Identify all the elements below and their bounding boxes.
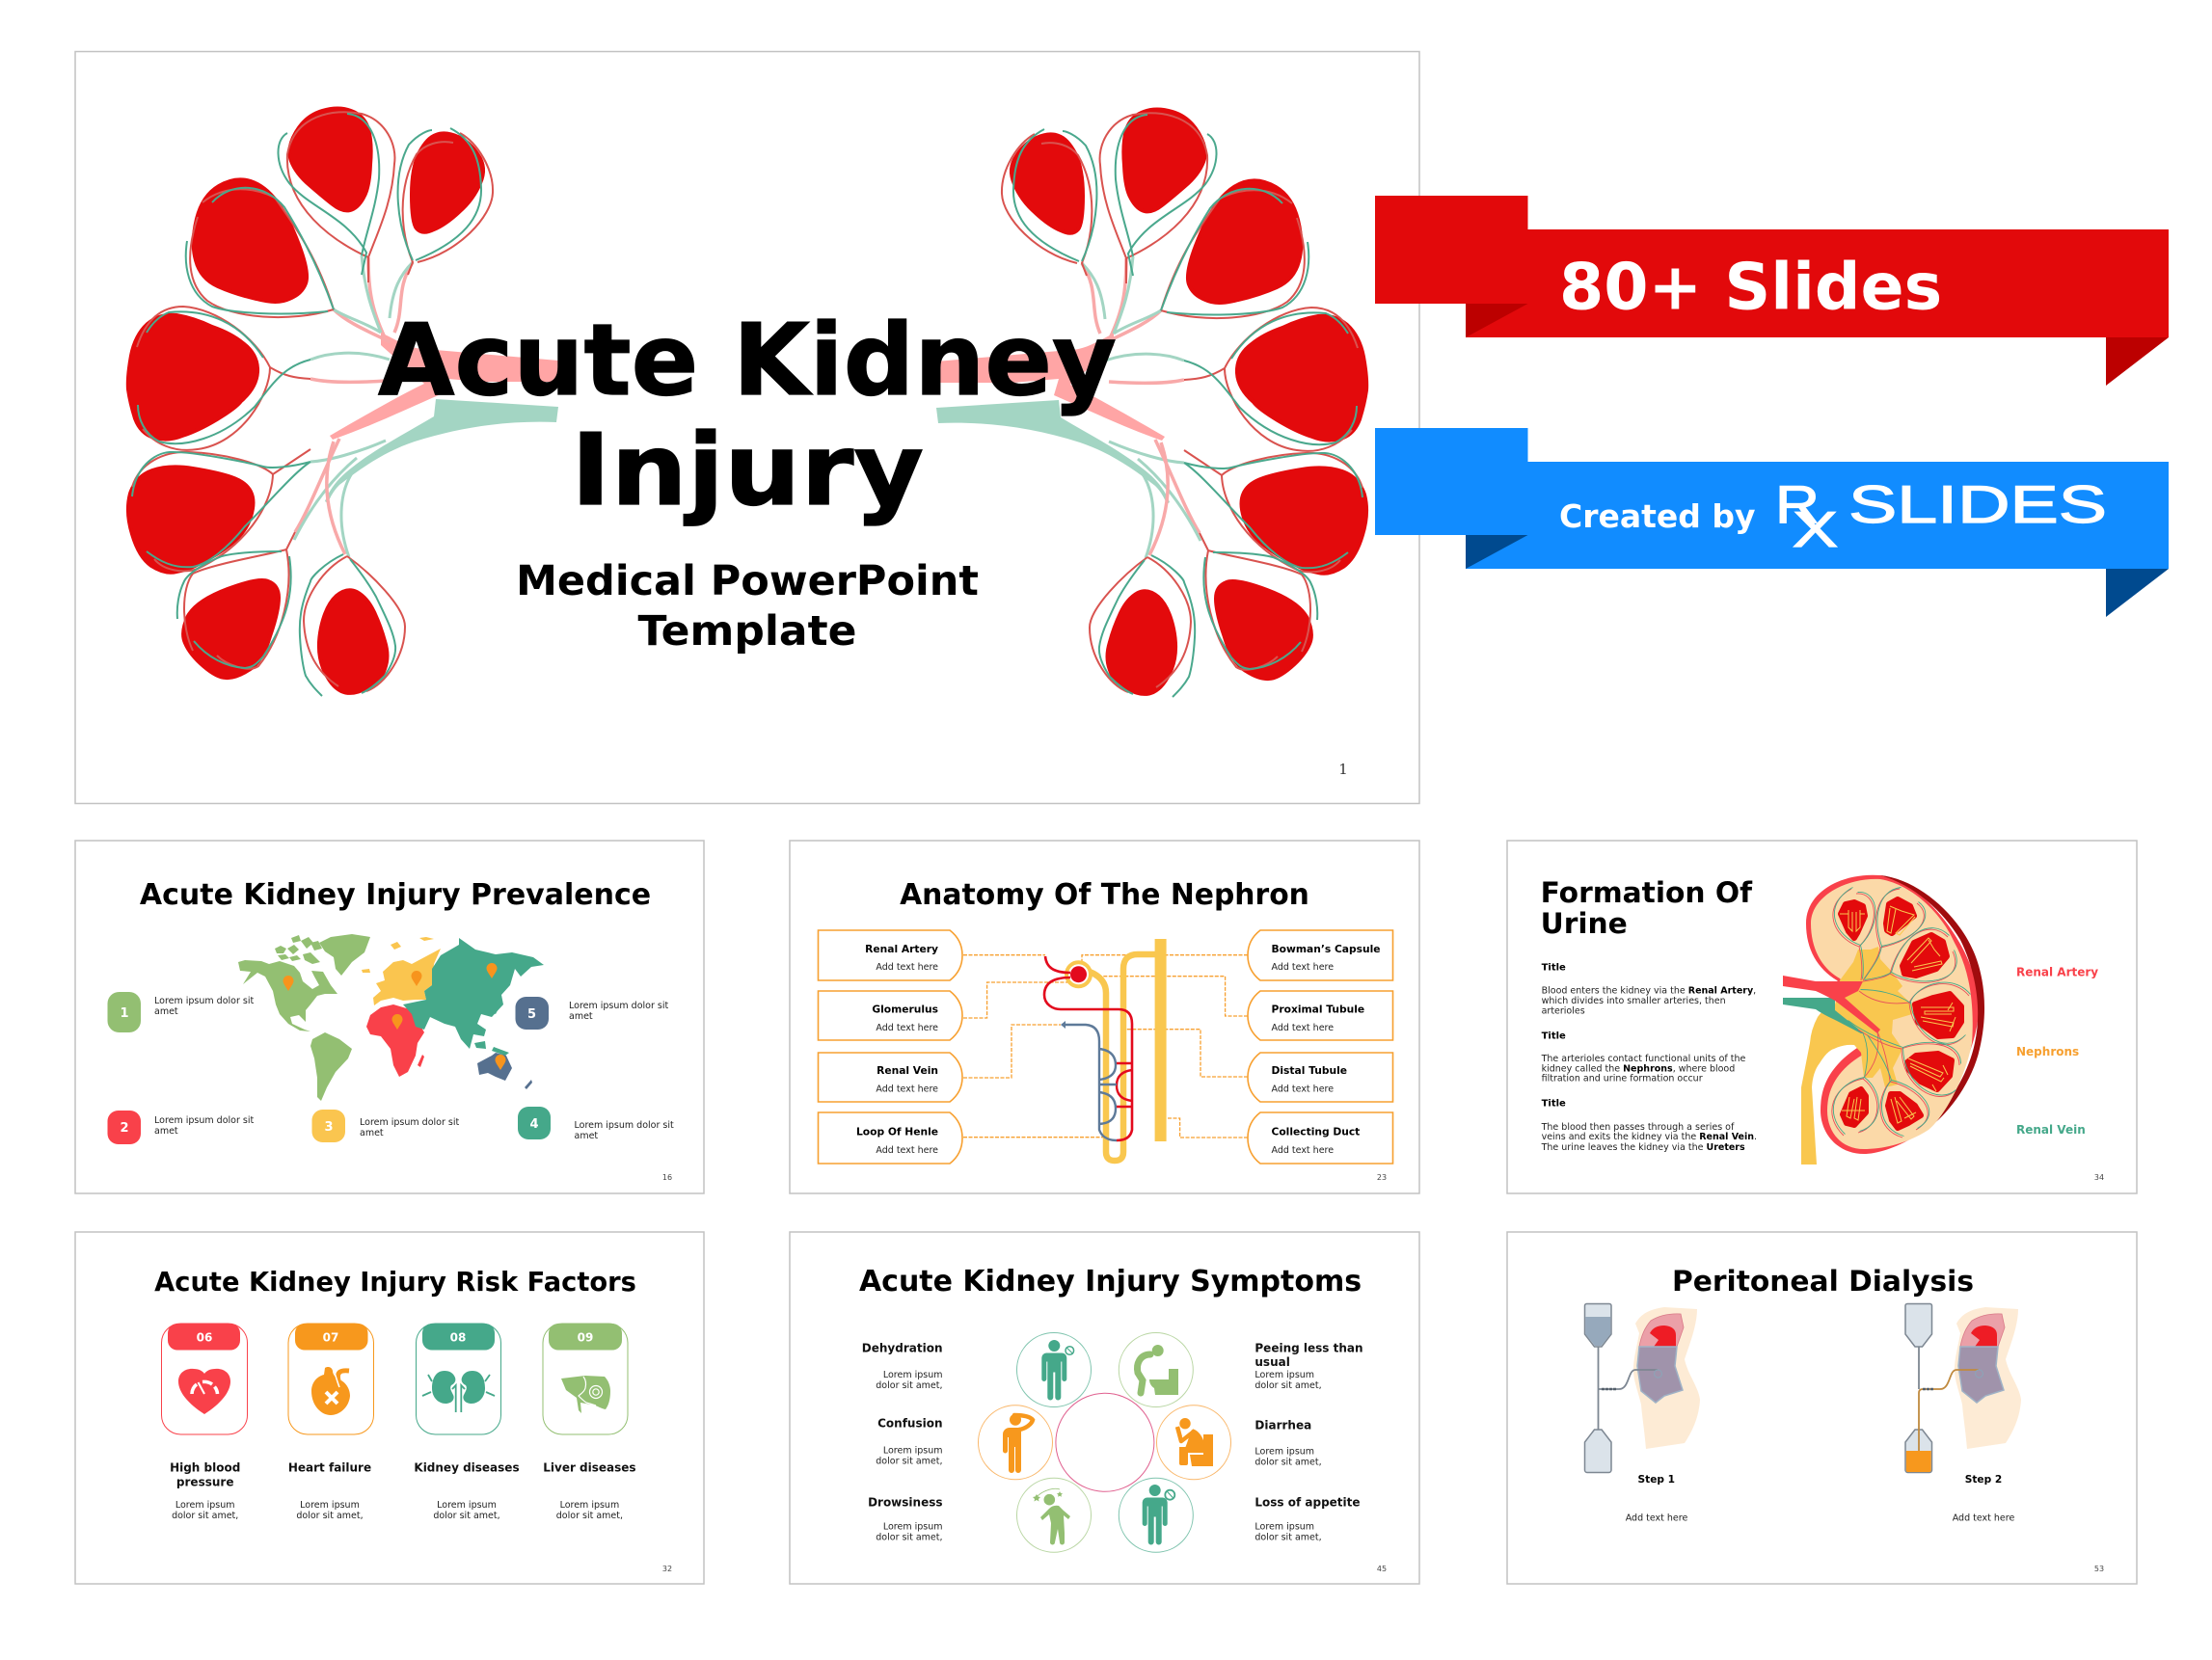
heading: Acute Kidney Injury Prevalence bbox=[140, 878, 651, 912]
text block 2: Title bbox=[1542, 1031, 1566, 1041]
label: Proximal Tubule bbox=[1248, 991, 1392, 1040]
text: Diarrhea: Diarrhea bbox=[1254, 1418, 1311, 1432]
tube clamp bbox=[1602, 1388, 1616, 1390]
card: liver diseases: 09 bbox=[578, 1331, 593, 1345]
legend item 4: Lorem ipsum dolor sit bbox=[575, 1120, 674, 1131]
dark outer rim bbox=[1880, 875, 1984, 1136]
location pins bbox=[283, 963, 505, 1070]
body bbox=[1633, 1307, 1700, 1449]
card: kidney diseases bbox=[417, 1324, 501, 1434]
heading: Anatomy Of The Nephron bbox=[900, 878, 1309, 912]
kidney outer wall bbox=[1806, 875, 1979, 1154]
caption: heart failure: Lorem ipsum bbox=[300, 1500, 360, 1511]
illustration: right half of kidney lobes (mirror) bbox=[936, 110, 1366, 697]
diagram: step 1 bbox=[1585, 1303, 1700, 1473]
page number: 32 bbox=[662, 1565, 672, 1573]
page number: 45 bbox=[1377, 1565, 1387, 1573]
label: Renal Artery: Add text here bbox=[876, 962, 938, 973]
label: Renal Artery: Renal Artery bbox=[865, 943, 938, 955]
ribbon text: 80+ Slides bbox=[1559, 249, 1942, 324]
caption: step 1: Add text here bbox=[1626, 1513, 1687, 1523]
icon: liver bbox=[561, 1376, 610, 1413]
legend item 1: Lorem ipsum dolor sit bbox=[154, 996, 254, 1006]
label: Proximal Tubule: Proximal Tubule bbox=[1271, 1004, 1364, 1016]
caption: kidney diseases: Kidney diseases bbox=[414, 1461, 520, 1475]
label: Loop Of Henle bbox=[818, 1112, 962, 1164]
caption: kidney diseases bbox=[414, 1461, 520, 1521]
legend item 2: Lorem ipsum dolor sit bbox=[154, 1115, 254, 1126]
caption: kidney diseases: Lorem ipsum bbox=[437, 1500, 497, 1511]
top tube bbox=[1918, 1347, 1920, 1389]
legend item 5: amet bbox=[569, 1011, 593, 1022]
text: Peeing less than usual bbox=[1254, 1341, 1363, 1391]
text: Confusion: Lorem ipsum bbox=[883, 1446, 943, 1457]
page number: 34 bbox=[2094, 1173, 2104, 1182]
caption: heart failure: Heart failure bbox=[288, 1461, 371, 1475]
label: Distal Tubule bbox=[1248, 1053, 1392, 1102]
text: Diarrhea bbox=[1254, 1418, 1322, 1468]
caption: kidney diseases: dolor sit amet, bbox=[433, 1511, 500, 1521]
legend item 3: 3 bbox=[324, 1120, 334, 1135]
card: liver diseases bbox=[543, 1324, 628, 1434]
caption: high blood pressure bbox=[170, 1461, 240, 1521]
text block 1: Title bbox=[1542, 963, 1566, 974]
text block 1: Blood enters the kidney via the Renal Artery, bbox=[1542, 986, 1756, 997]
label: Bowman's Capsule bbox=[1248, 930, 1392, 980]
legend item 3: amet bbox=[360, 1128, 384, 1138]
text block 2 bbox=[1541, 1031, 1746, 1084]
renal vein bbox=[1783, 998, 1864, 1033]
main title: Acute Kidney bbox=[378, 304, 1117, 418]
tubules inside lobes bbox=[1840, 906, 1956, 1123]
caption: high blood pressure: pressure bbox=[176, 1476, 233, 1489]
icon: kidneys bbox=[422, 1371, 495, 1412]
caption: liver diseases bbox=[543, 1461, 636, 1521]
label: Glomerulus: Glomerulus bbox=[872, 1004, 938, 1016]
caption: step 1 bbox=[1626, 1474, 1687, 1523]
caption: step 1: Step 1 bbox=[1638, 1474, 1675, 1486]
text block 2: filtration and urine formation occur bbox=[1542, 1074, 1703, 1084]
legend item 1: amet bbox=[154, 1006, 178, 1017]
heading: Formation Of bbox=[1541, 876, 1753, 910]
logo: Rx Slides: SLIDES bbox=[1848, 474, 2107, 534]
caption: high blood pressure: dolor sit amet, bbox=[172, 1511, 238, 1521]
drain tubing bbox=[1919, 1370, 1979, 1451]
label: Collecting Duct: Collecting Duct bbox=[1271, 1126, 1360, 1138]
card: kidney diseases: 08 bbox=[450, 1331, 466, 1345]
Americas and Greenland bbox=[238, 934, 370, 1101]
body bbox=[1955, 1307, 2021, 1449]
top bag bbox=[1905, 1303, 1932, 1347]
label: Renal Artery bbox=[818, 930, 962, 980]
illustration: left half of kidney lobes bbox=[128, 108, 558, 696]
label: Renal Artery: Renal Artery bbox=[2016, 966, 2098, 979]
panel: formation of urine slide bbox=[1507, 841, 2137, 1193]
label: Renal Vein bbox=[818, 1053, 962, 1102]
dashed connectors bbox=[963, 955, 1248, 1138]
world map bbox=[238, 934, 544, 1101]
label: Bowman's Capsule: Add text here bbox=[1271, 962, 1334, 973]
logo: Rx Slides bbox=[1775, 474, 2107, 558]
Australia bbox=[477, 1053, 532, 1089]
heading: Urine bbox=[1541, 907, 1628, 941]
bottom bag bbox=[1905, 1430, 1932, 1473]
abdominal cavity bbox=[1639, 1314, 1684, 1347]
text: Diarrhea: Lorem ipsum bbox=[1254, 1447, 1314, 1458]
card: high blood pressure: 06 bbox=[197, 1331, 212, 1345]
legend item 2 bbox=[108, 1111, 254, 1144]
label: Distal Tubule: Add text here bbox=[1271, 1084, 1334, 1095]
icon: person dehydration bbox=[1041, 1340, 1074, 1400]
text: Peeing less than usual: dolor sit amet, bbox=[1254, 1380, 1322, 1391]
caption: high blood pressure: Lorem ipsum bbox=[175, 1500, 235, 1511]
page number: 16 bbox=[662, 1173, 672, 1182]
kidney inner tissue bbox=[1811, 879, 1973, 1149]
text block 3: The urine leaves the kidney via the Ureters bbox=[1541, 1142, 1745, 1153]
diagram: step 2 bbox=[1905, 1303, 2021, 1473]
icon: person with diarrhea on toilet bbox=[1177, 1418, 1213, 1466]
text: Confusion: Confusion bbox=[877, 1417, 943, 1431]
caption: step 2 bbox=[1953, 1474, 2014, 1523]
top bag bbox=[1585, 1303, 1611, 1347]
label: Glomerulus bbox=[818, 991, 962, 1040]
text: Drowsiness: Drowsiness bbox=[868, 1495, 943, 1509]
text: Dehydration: Dehydration bbox=[862, 1341, 943, 1354]
label: Bowman's Capsule: Bowman’s Capsule bbox=[1271, 943, 1381, 955]
text: Loss of appetite: Loss of appetite bbox=[1254, 1495, 1361, 1509]
legend item 1 bbox=[108, 992, 254, 1032]
heading: Acute Kidney Injury Risk Factors bbox=[154, 1268, 636, 1298]
text block 3: Title bbox=[1542, 1099, 1566, 1110]
panel: risk factors slide bbox=[75, 1232, 704, 1584]
caption: heart failure bbox=[288, 1461, 371, 1521]
legend item 4: amet bbox=[575, 1131, 598, 1141]
caption: heart failure: dolor sit amet, bbox=[296, 1511, 364, 1521]
label: Loop Of Henle: Add text here bbox=[876, 1145, 938, 1156]
text block 3: veins and exits the kidney via the Renal Vein. bbox=[1542, 1132, 1757, 1142]
text block 1: arterioles bbox=[1542, 1005, 1585, 1016]
subtitle line 2: Template bbox=[638, 607, 856, 656]
icon: dizzy person bbox=[1033, 1488, 1070, 1544]
renal artery bbox=[1783, 976, 1880, 1033]
Europe bbox=[362, 937, 441, 1005]
text block 1 bbox=[1542, 963, 1756, 1016]
legend item 5: Lorem ipsum dolor sit bbox=[569, 1001, 668, 1011]
main renal vein band bbox=[325, 399, 558, 503]
ribbon: 80+ slides bbox=[1375, 196, 2169, 386]
legend item 4: 4 bbox=[529, 1117, 539, 1132]
text: Drowsiness bbox=[868, 1495, 943, 1543]
symptom rings bbox=[978, 1332, 1230, 1552]
text: Dehydration: Lorem ipsum bbox=[883, 1370, 943, 1380]
red vessels around lobes bbox=[1832, 889, 1969, 1138]
label: Distal Tubule: Distal Tubule bbox=[1271, 1064, 1347, 1077]
caption: liver diseases: Liver diseases bbox=[543, 1461, 636, 1475]
catheter cuff bbox=[1655, 1370, 1662, 1378]
tube clamp bbox=[1923, 1388, 1934, 1390]
kidney cross-section bbox=[1783, 875, 1984, 1165]
dialysate fluid bbox=[1958, 1347, 2004, 1403]
main renal artery band bbox=[330, 333, 558, 440]
red artery outlines bbox=[132, 112, 493, 691]
icon: heart with gauge bbox=[178, 1369, 230, 1414]
lobe blobs bbox=[128, 108, 483, 693]
legend item 5 bbox=[515, 997, 668, 1030]
text: Dehydration: dolor sit amet, bbox=[876, 1380, 943, 1391]
green vein outlines bbox=[132, 114, 481, 696]
text block 3 bbox=[1541, 1099, 1757, 1153]
text: Peeing less than usual: Peeing less than bbox=[1254, 1341, 1363, 1354]
Africa bbox=[366, 1004, 424, 1077]
caption: liver diseases: Lorem ipsum bbox=[560, 1500, 619, 1511]
pale branching stalks bbox=[294, 255, 413, 557]
text: Loss of appetite: Lorem ipsum bbox=[1254, 1522, 1314, 1533]
caption: liver diseases: dolor sit amet, bbox=[556, 1511, 623, 1521]
text: Loss of appetite: dolor sit amet, bbox=[1254, 1533, 1322, 1543]
dialysate fluid bbox=[1637, 1347, 1683, 1403]
panel: peritoneal dialysis slide bbox=[1507, 1232, 2137, 1584]
heading bbox=[1541, 876, 1753, 941]
drained fluid bbox=[1906, 1451, 1931, 1472]
Asia bbox=[403, 938, 544, 1056]
logo: Rx Slides: R bbox=[1775, 474, 1820, 534]
label: Glomerulus: Add text here bbox=[876, 1023, 938, 1033]
tubing bbox=[1599, 1347, 1658, 1430]
text: Drowsiness: dolor sit amet, bbox=[876, 1533, 943, 1543]
panel: prevalence map slide bbox=[75, 841, 704, 1193]
legend item 3: Lorem ipsum dolor sit bbox=[360, 1117, 459, 1128]
nephron diagram bbox=[1044, 939, 1167, 1161]
catheter cuff bbox=[1975, 1370, 1983, 1378]
text: Peeing less than usual: Lorem ipsum bbox=[1254, 1370, 1314, 1380]
page number: 23 bbox=[1377, 1173, 1387, 1182]
subtitle: Medical PowerPoint bbox=[516, 557, 979, 605]
card: heart failure: 07 bbox=[323, 1331, 338, 1345]
text: Confusion bbox=[876, 1417, 943, 1467]
text block 2: The arterioles contact functional units of the bbox=[1541, 1054, 1746, 1064]
panel: nephron anatomy slide bbox=[790, 841, 1419, 1193]
label: Collecting Duct: Add text here bbox=[1271, 1145, 1334, 1156]
page number: 1 bbox=[1338, 761, 1348, 778]
panel: symptoms slide bbox=[790, 1232, 1419, 1584]
legend item 2: 2 bbox=[120, 1121, 129, 1136]
logo: Rx Slides: X bbox=[1793, 502, 1838, 558]
text: Peeing less than usual: usual bbox=[1254, 1355, 1290, 1369]
organ bbox=[1971, 1325, 1997, 1347]
card: heart failure bbox=[288, 1324, 374, 1434]
green vessels around lobes bbox=[1833, 887, 1971, 1136]
label: Renal Vein: Renal Vein bbox=[2016, 1123, 2086, 1137]
text: Loss of appetite bbox=[1254, 1495, 1361, 1543]
legend item 3 bbox=[312, 1110, 459, 1142]
text: Dehydration bbox=[862, 1341, 943, 1391]
bottom bag bbox=[1585, 1430, 1611, 1473]
caption: step 2: Add text here bbox=[1953, 1513, 2014, 1523]
label: Proximal Tubule: Add text here bbox=[1271, 1023, 1334, 1033]
icon: person at toilet bbox=[1138, 1345, 1178, 1395]
text block 1: which divides into smaller arteries, then bbox=[1542, 996, 1726, 1006]
label: Nephrons: Nephrons bbox=[2016, 1045, 2079, 1058]
legend item 1: 1 bbox=[120, 1006, 129, 1021]
kidney lobes bbox=[1841, 899, 1961, 1128]
text: Diarrhea: dolor sit amet, bbox=[1254, 1458, 1322, 1468]
heading: Peritoneal Dialysis bbox=[1672, 1265, 1974, 1299]
created by text: Created by bbox=[1559, 497, 1756, 535]
caption: step 2: Step 2 bbox=[1965, 1474, 2002, 1486]
text: Confusion: dolor sit amet, bbox=[876, 1457, 943, 1467]
text block 3: The blood then passes through a series of bbox=[1541, 1122, 1735, 1133]
heading: Acute Kidney Injury Symptoms bbox=[859, 1265, 1362, 1299]
ureter and renal pelvis bbox=[1801, 947, 1912, 1165]
organ bbox=[1650, 1325, 1676, 1347]
label: Renal Vein: Add text here bbox=[876, 1084, 938, 1095]
icon: person loss of appetite bbox=[1143, 1485, 1174, 1544]
text block 2: kidney called the Nephrons, where blood bbox=[1542, 1063, 1735, 1074]
label: Collecting Duct bbox=[1248, 1112, 1392, 1164]
panel: main title slide bbox=[75, 52, 1419, 804]
legend item 2: amet bbox=[154, 1126, 178, 1137]
abdominal cavity bbox=[1960, 1314, 2005, 1347]
label: Renal Vein: Renal Vein bbox=[877, 1064, 938, 1077]
icon: anatomical heart bbox=[311, 1367, 350, 1415]
legend item 4 bbox=[518, 1107, 674, 1141]
icon: confused person bbox=[1003, 1414, 1033, 1473]
ribbon: created by RX Slides bbox=[1375, 428, 2169, 617]
main title line 2: Injury bbox=[571, 414, 924, 528]
card: high blood pressure bbox=[162, 1324, 247, 1434]
text: Drowsiness: Lorem ipsum bbox=[883, 1522, 943, 1533]
caption: high blood pressure: High blood bbox=[170, 1461, 240, 1475]
page number: 53 bbox=[2094, 1565, 2104, 1573]
legend item 5: 5 bbox=[527, 1007, 536, 1022]
label: Loop Of Henle: Loop Of Henle bbox=[856, 1126, 938, 1138]
